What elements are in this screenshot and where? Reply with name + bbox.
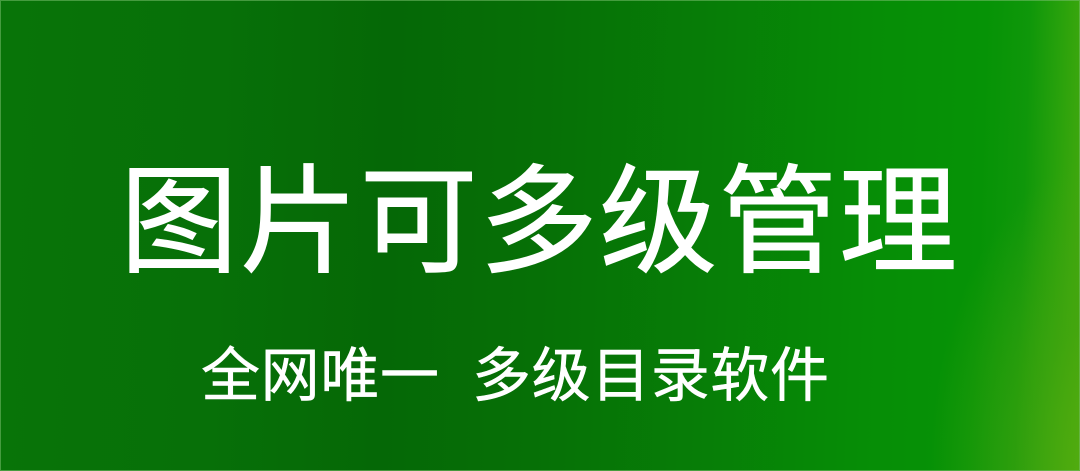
subtitle: right phrase: 多级目录软件: [472, 343, 829, 409]
title: 图片可多级管理: [120, 157, 957, 289]
subtitle: left phrase: 全网唯一: [201, 343, 439, 409]
